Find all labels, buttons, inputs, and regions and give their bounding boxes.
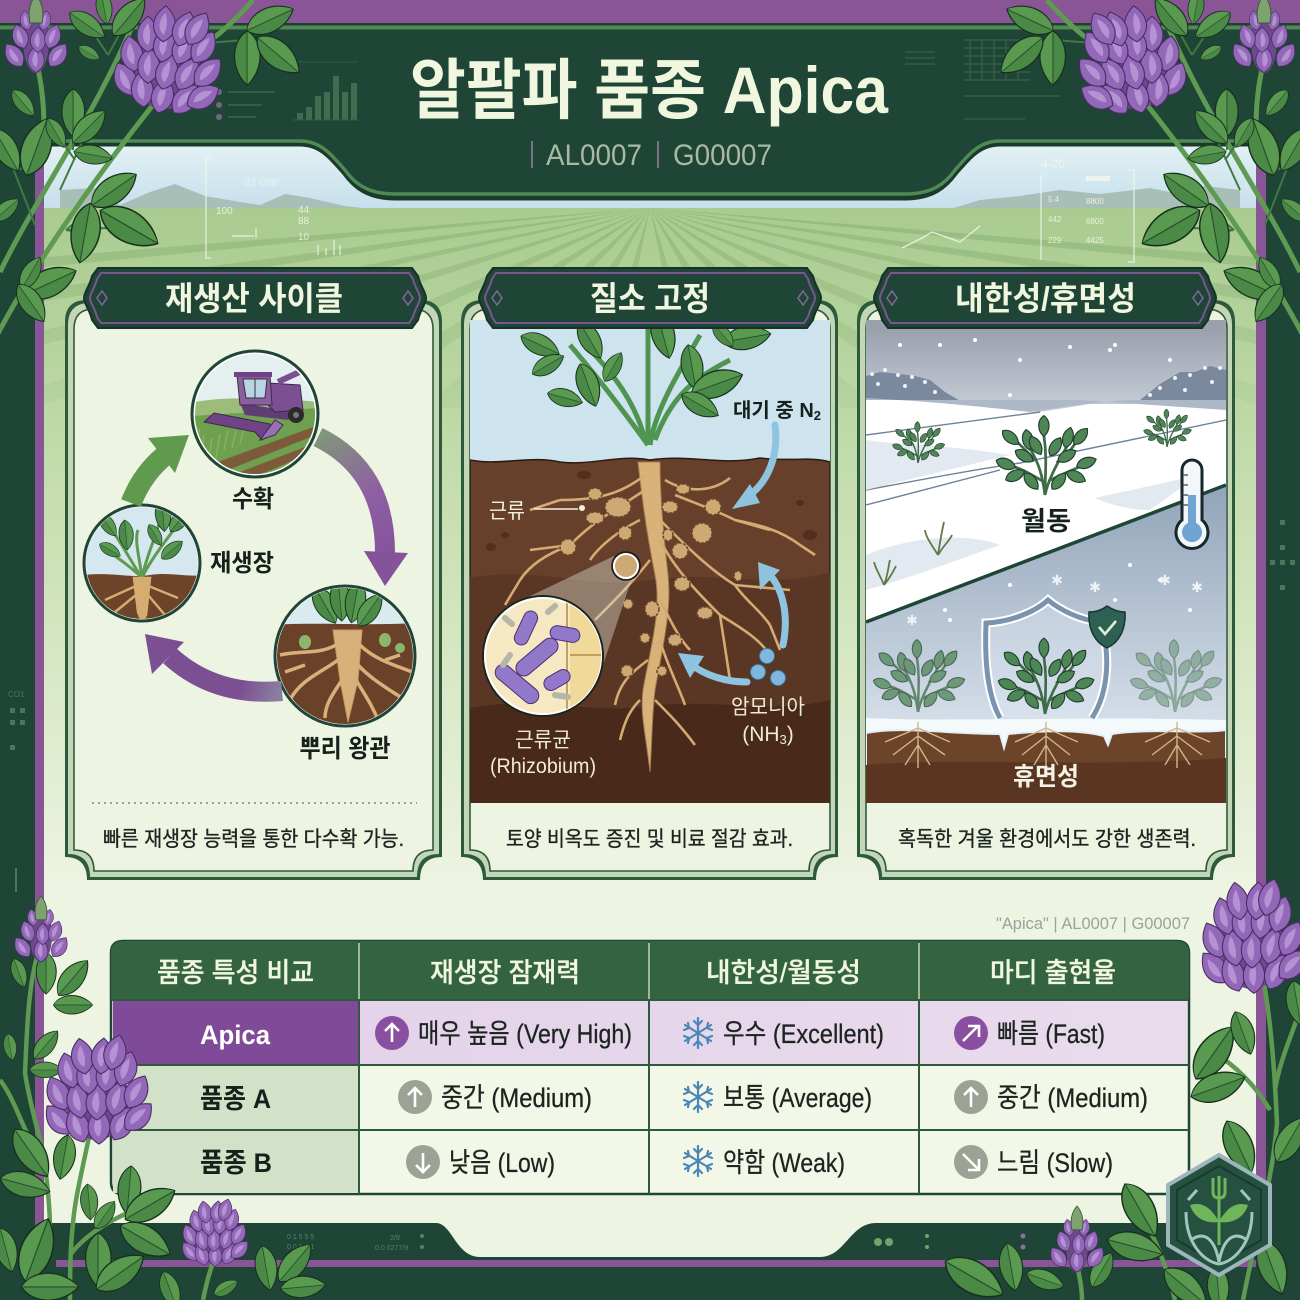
plant: top left alfalfa [0, 0, 307, 345]
purple top band [0, 0, 1300, 31]
footer decoration: status dots [874, 1234, 1026, 1250]
label: rhizobium [490, 729, 596, 778]
winter scene: ✱ [1051, 572, 1063, 588]
icon: root crown [275, 578, 415, 726]
plant: top right alfalfa [993, 0, 1300, 345]
plaque: nitrogen heading: 질소 고정 [590, 280, 710, 317]
field data overlay right: 4425 [1086, 236, 1104, 245]
label: nodule with leader: 근류 [489, 500, 525, 523]
caption 1: 빠른 재생장 능력을 통한 다수확 가능. [103, 828, 404, 851]
plaque: hardiness heading: 내한성/휴면성 [955, 280, 1136, 317]
label: atmospheric nitrogen: 2 [814, 408, 821, 423]
footer band [44, 1223, 1256, 1300]
header decoration: data grid [905, 40, 1060, 119]
plant: bottom left alfalfa [0, 896, 326, 1300]
roots and nodules [505, 462, 815, 772]
magnified rhizobium [483, 552, 640, 720]
dotted divider [92, 802, 417, 804]
header panel [0, 30, 1300, 197]
plants: dormant group above frost [872, 638, 1223, 714]
plant: bottom right alfalfa [938, 876, 1300, 1300]
table header row: 마디 출현율 [990, 958, 1116, 988]
label: overwintering: 월동 [1021, 506, 1071, 536]
table header row: 내한성/월동성 [706, 958, 861, 988]
field data overlay left: 88 [298, 216, 310, 227]
plaque: regrowth heading: 재생산 사이클 [165, 280, 343, 317]
label: dormancy: 휴면성 [1013, 763, 1079, 791]
label: nodule with leader [489, 500, 585, 523]
table header row: 재생장 잠재력 [430, 958, 580, 988]
label: ammonia: (NH [742, 723, 780, 746]
row: Apica: 빠름 (Fast) [997, 1019, 1105, 1049]
icon: protective shield [986, 600, 1125, 718]
label: rhizobium: (Rhizobium) [490, 755, 596, 778]
plaque: hardiness heading [874, 268, 1216, 328]
side decoration: data dots: CO1 [8, 690, 25, 699]
panel frame 2 [461, 300, 838, 880]
field data overlay right: 8800 [1086, 197, 1104, 206]
dormant roots [885, 722, 1210, 768]
field data overlay right: 5.4 [1048, 195, 1060, 204]
winter scene: ✱ [1089, 579, 1101, 595]
field data overlay left: 100 [216, 206, 233, 217]
panel frame 1 [65, 300, 442, 880]
field data overlay left [206, 157, 340, 258]
row: variety B: 품종 B [200, 1148, 272, 1178]
field data overlay right: 229 [1048, 236, 1062, 245]
label: atmospheric nitrogen: 대기 중 N [733, 400, 814, 422]
blue arrows [678, 425, 785, 682]
table header row [157, 958, 1116, 988]
row: Apica: 매우 높음 (Very High) [418, 1019, 632, 1049]
winter scene [866, 320, 1226, 803]
row: variety A: 중간 (Medium) [441, 1083, 592, 1113]
row: Apica: Apica [200, 1020, 271, 1050]
footer decoration: 0 0 8 8 1 [287, 1244, 314, 1251]
logo badge [1168, 1155, 1270, 1275]
icon: harvest combine [190, 350, 320, 484]
winter scene: ✱ [1159, 572, 1171, 588]
arrow: regrowth to harvest [131, 435, 189, 503]
field data overlay right [902, 157, 1134, 262]
label: ammonia: 암모니아 [731, 696, 805, 719]
plaque: nitrogen heading [479, 268, 821, 328]
header decoration: bullets and bar chart [216, 62, 358, 120]
footer decoration: 2/9 [390, 1235, 400, 1242]
soil and sky illustration [470, 320, 830, 803]
plants: frost-tolerant group on snow [892, 409, 1192, 495]
table header row: 품종 특성 비교 [157, 958, 314, 988]
subtitle codes [532, 139, 772, 172]
row: Apica: 우수 (Excellent) [723, 1019, 884, 1049]
row: variety B: 느림 (Slow) [997, 1148, 1113, 1178]
row: variety A [200, 1080, 1148, 1114]
table backgrounds [111, 941, 1189, 1194]
icon: ammonia molecules [750, 648, 786, 686]
plaque: regrowth heading [84, 268, 426, 328]
label: rhizobium: 근류균 [515, 729, 571, 752]
caption 2: 토양 비옥도 증진 및 비료 절감 효과. [506, 828, 793, 851]
row: variety A: 보통 (Average) [723, 1083, 872, 1113]
field data overlay left: 44 [298, 205, 310, 216]
row: variety A: 품종 A [200, 1084, 271, 1114]
field data overlay right: 4-20 [1041, 157, 1065, 171]
alfalfa plant top [520, 329, 772, 446]
subtitle codes: AL0007 [546, 139, 642, 172]
row: variety B: 약함 (Weak) [723, 1148, 845, 1178]
row: variety A: 중간 (Medium) [997, 1083, 1148, 1113]
panel: regrowth cycle [65, 300, 442, 880]
comparison table [111, 941, 1189, 1194]
side decoration: data dots [8, 520, 1295, 892]
source note: "Apica" | AL0007 | G00007 [996, 914, 1190, 933]
caption 3: 혹독한 겨울 환경에서도 강한 생존력. [898, 828, 1196, 851]
footer decoration: 0 1 5 5 5 [287, 1234, 314, 1241]
panel: nitrogen fixation [461, 300, 838, 880]
label: ammonia [731, 696, 805, 747]
label: root crown: 뿌리 왕관 [300, 735, 390, 763]
field data overlay left: 10 [298, 232, 310, 243]
panel frame 3 [857, 300, 1235, 880]
row: Apica [200, 1016, 1105, 1050]
field data overlay right: 442 [1048, 215, 1062, 224]
arrow: root crown to regrowth [145, 634, 282, 692]
label: harvest: 수확 [232, 486, 274, 513]
arrow: harvest to root crown [318, 437, 408, 586]
field data overlay left: 32 098 [244, 177, 278, 189]
subtitle codes: G00007 [673, 139, 772, 172]
winter scene: ✱ [1191, 579, 1203, 595]
label: regrowth: 재생장 [210, 550, 274, 577]
label: ammonia: ) [787, 723, 794, 746]
panel: winter hardiness [857, 300, 1235, 880]
icon: thermometer [1176, 460, 1208, 548]
winter scene: ✱ [906, 612, 918, 628]
icon: regrowth plant [84, 498, 200, 625]
title: 알팔파 품종 Apica [410, 53, 889, 127]
row: variety B: 낮음 (Low) [449, 1148, 555, 1178]
footer decoration: 0.0 0277/9 [375, 1245, 408, 1252]
row: variety B [200, 1145, 1113, 1179]
footer decoration [287, 1234, 424, 1252]
field data overlay right: 8800 [1086, 217, 1104, 226]
label: ammonia: 3 [780, 732, 787, 747]
